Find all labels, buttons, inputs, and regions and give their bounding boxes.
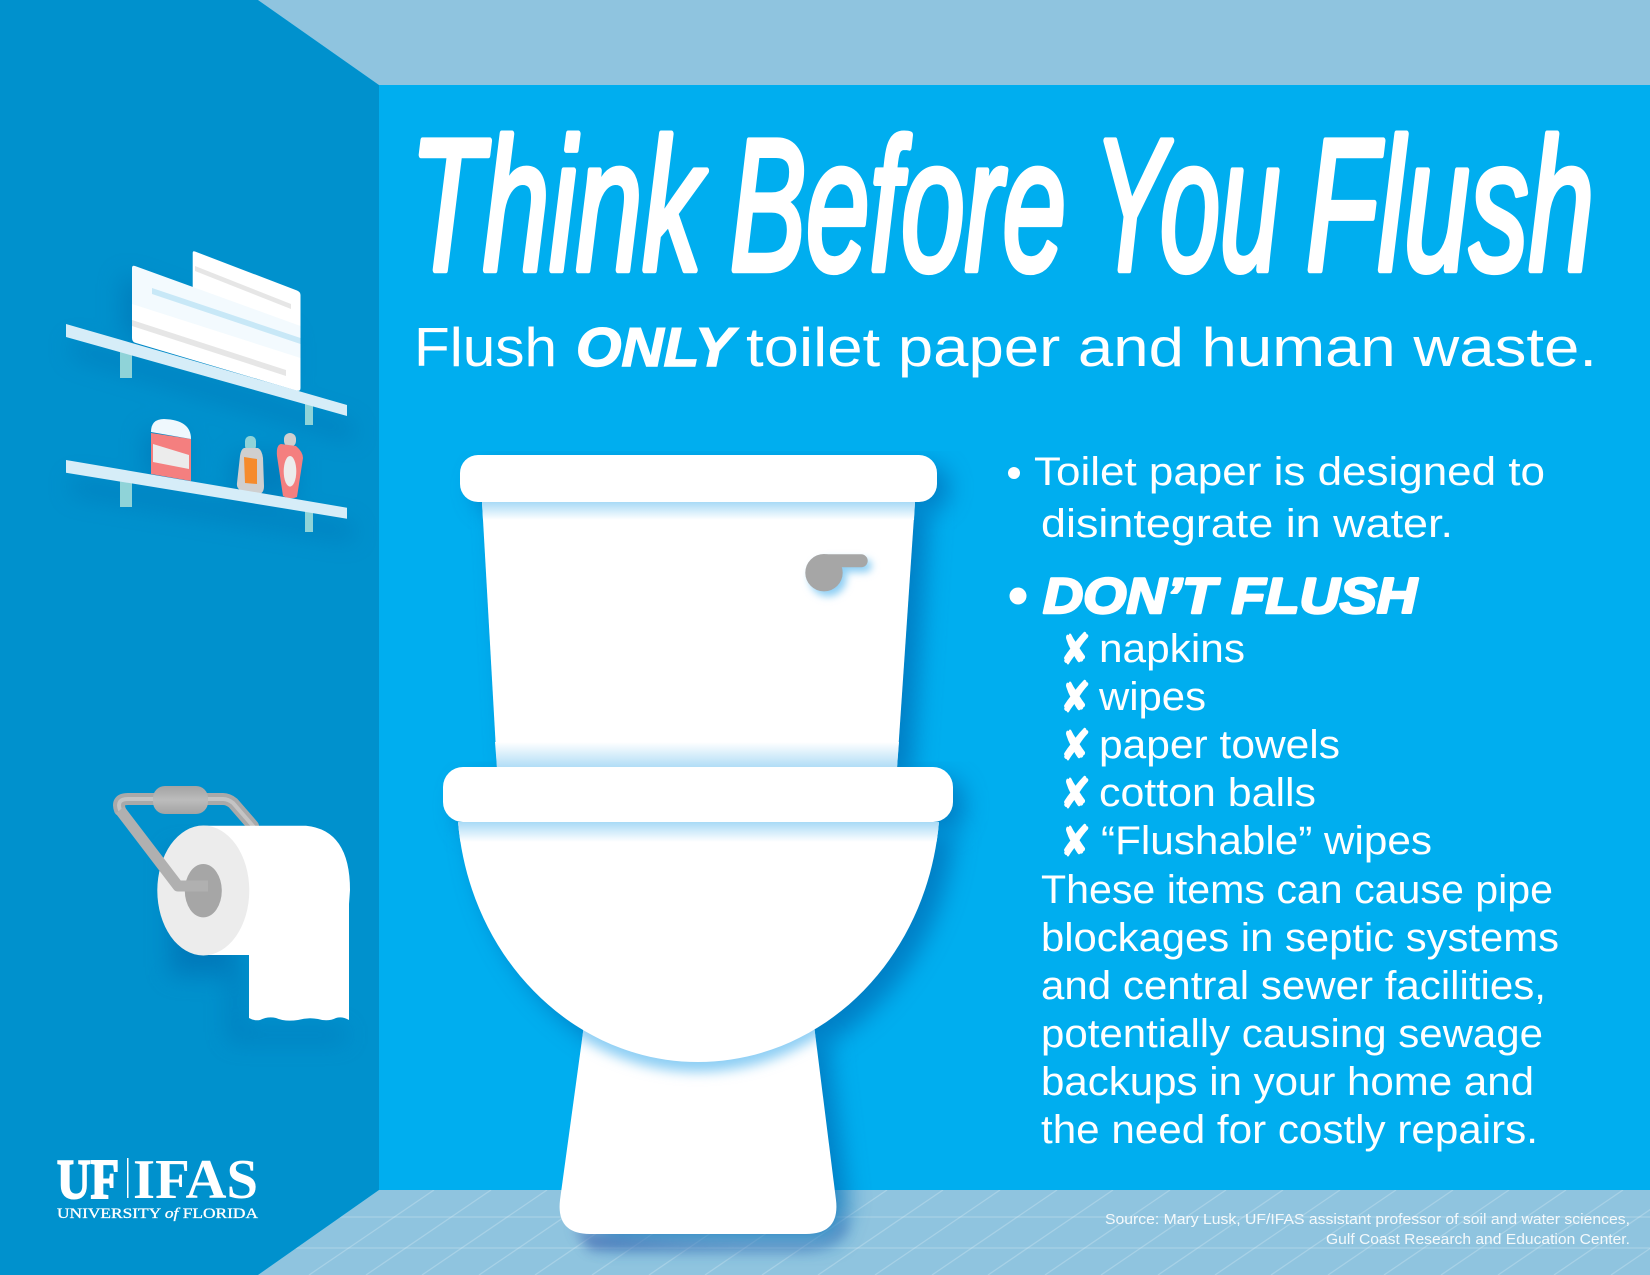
don't flush list: cotton balls xyxy=(1099,771,1316,815)
title xyxy=(410,100,1594,310)
title: Think xyxy=(410,100,707,310)
upper shelf board xyxy=(66,324,347,416)
title: Before xyxy=(730,100,1066,310)
upper shelf brackets xyxy=(120,345,313,425)
logo: UF IFAS University of Florida xyxy=(57,1149,258,1222)
subtitle: ONLY xyxy=(576,316,739,378)
source credit: Source: Mary Lusk, UF/IFAS assistant professor of soil and water sciences, xyxy=(1105,1211,1630,1228)
logo: UF IFAS University of Florida: UNIVERSITY of FLORIDA xyxy=(57,1206,258,1222)
logo: UF IFAS University of Florida: UF xyxy=(57,1149,119,1211)
intro bullet: disintegrate in water. xyxy=(1041,502,1453,546)
toilet base xyxy=(560,1029,836,1234)
don't flush list: ✘ xyxy=(1060,625,1091,675)
tiled floor xyxy=(258,1190,1650,1275)
shelves with towels and bottles xyxy=(66,251,353,540)
subtitle: toilet paper and human waste. xyxy=(746,316,1597,378)
small bottle xyxy=(237,436,264,494)
bowl rim xyxy=(443,767,953,822)
back wall xyxy=(379,85,1650,1190)
left wall xyxy=(0,0,379,1275)
flush handle xyxy=(805,554,872,596)
don't flush list: paper towels xyxy=(1099,723,1340,767)
warning paragraph xyxy=(1041,868,1559,1152)
tank lid xyxy=(460,455,937,502)
holder arm front xyxy=(120,810,208,886)
title: You xyxy=(1094,100,1280,310)
don't flush list xyxy=(1060,625,1432,867)
warning paragraph: blockages in septic systems xyxy=(1041,916,1559,960)
don't flush list: wipes xyxy=(1098,675,1206,719)
don't flush heading: DON’T FLUSH xyxy=(1043,568,1418,624)
warning paragraph: These items can cause pipe xyxy=(1041,868,1553,912)
warning paragraph: backups in your home and xyxy=(1041,1060,1534,1104)
bowl xyxy=(458,822,939,1062)
warning paragraph: potentially causing sewage xyxy=(1041,1012,1543,1056)
don't flush list: ✘ xyxy=(1060,721,1091,771)
intro bullet xyxy=(1008,450,1545,546)
lower shelf board xyxy=(66,460,347,519)
roll end face xyxy=(157,826,249,956)
base shadow on floor xyxy=(572,1205,846,1250)
subtitle xyxy=(414,316,1597,378)
lower shelf brackets xyxy=(120,475,313,532)
shelf shadows xyxy=(72,275,353,540)
source credit xyxy=(1105,1211,1630,1248)
intro bullet: Toilet paper is designed to xyxy=(1034,450,1545,494)
subtitle: Flush xyxy=(414,316,557,378)
stacked towels xyxy=(132,251,300,391)
ceiling xyxy=(258,0,1650,85)
roll core xyxy=(185,864,222,917)
logo: UF IFAS University of Florida: IFAS xyxy=(133,1149,258,1211)
body text xyxy=(1008,450,1559,1152)
holder grip xyxy=(153,786,208,814)
toilet drop shadows xyxy=(458,465,964,1240)
roll body xyxy=(203,826,350,1021)
don't flush list: napkins xyxy=(1099,627,1245,671)
tall bottle xyxy=(277,433,303,498)
don't flush list: ✘ xyxy=(1060,673,1091,723)
toilet xyxy=(443,455,964,1250)
holder arm behind roll xyxy=(119,799,253,826)
roll shadow xyxy=(170,850,345,1040)
don't flush list: ✘ xyxy=(1060,817,1091,867)
warning paragraph: and central sewer facilities, xyxy=(1041,964,1546,1008)
don't flush list: ✘ xyxy=(1060,769,1091,819)
tank xyxy=(482,502,915,768)
jar xyxy=(151,419,191,481)
source credit: Gulf Coast Research and Education Center. xyxy=(1326,1231,1630,1248)
toilet paper roll on holder xyxy=(119,786,350,1040)
don't flush list: “Flushable” wipes xyxy=(1101,819,1432,863)
warning paragraph: the need for costly repairs. xyxy=(1041,1108,1538,1152)
